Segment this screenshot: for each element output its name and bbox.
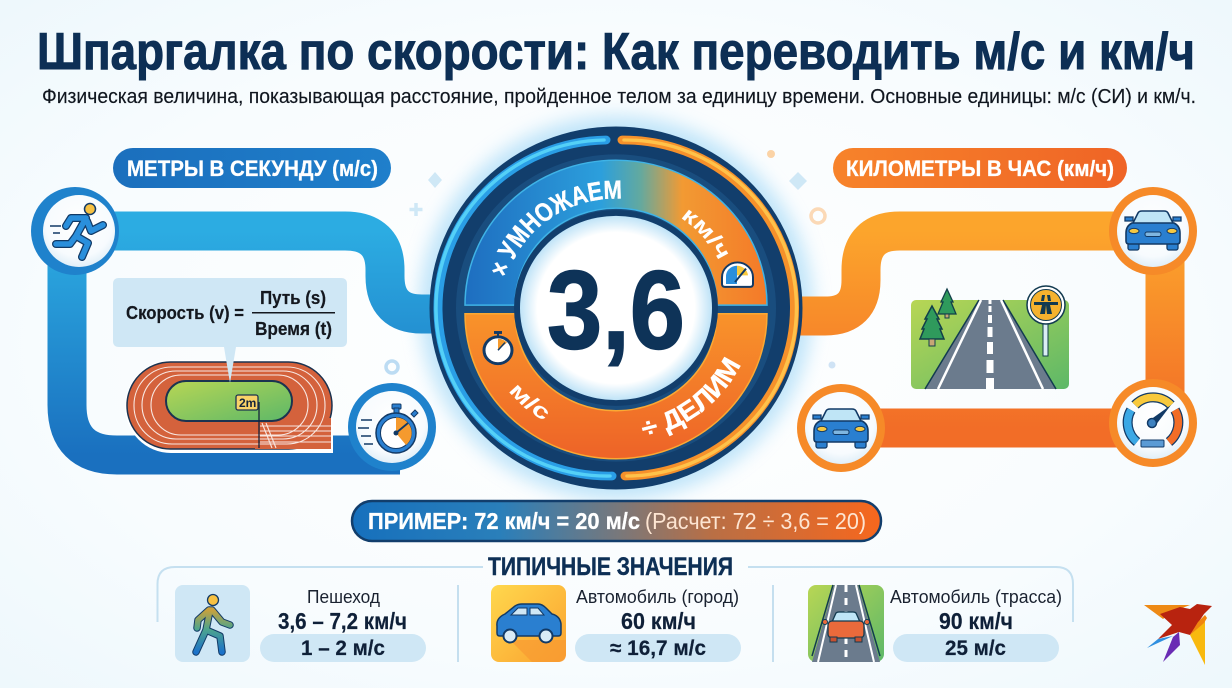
highway illustration (911, 286, 1069, 389)
panel: highway car (808, 585, 1062, 662)
icon: runner (31, 187, 119, 275)
formula callout (113, 278, 347, 383)
glow behind central ring (419, 116, 813, 500)
value pill: ≈ 16,7 м/с (610, 637, 706, 660)
icon: small stopwatch (484, 331, 512, 364)
panel: pedestrian: Пешеход (307, 587, 380, 607)
formula callout: Время (t) (255, 319, 332, 339)
icon: stopwatch (348, 383, 436, 471)
value pill (260, 634, 426, 662)
central conversion ring (430, 126, 802, 490)
badge: километры в час: КИЛОМЕТРЫ В ЧАС (км/ч) (846, 156, 1114, 181)
example pill (352, 501, 881, 541)
label: м/с: м/с (509, 384, 548, 419)
badge: метры в секунду: МЕТРЫ В СЕКУНДУ (м/с) (127, 156, 378, 181)
panel: pedestrian: 3,6 – 7,2 км/ч (278, 608, 407, 634)
badge: километры в час (833, 148, 1127, 188)
label: км/ч: км/ч (682, 210, 728, 259)
icon: speedometer (1109, 379, 1197, 467)
panel: city car (491, 585, 741, 662)
panel: metres per second track (31, 148, 445, 471)
orange path (790, 231, 1165, 428)
running track illustration: 2m (239, 396, 256, 410)
value pill (893, 634, 1059, 662)
panel: kilometres per hour track (790, 148, 1197, 472)
icon: car left (797, 384, 885, 472)
example pill: (Расчет: 72 ÷ 3,6 = 20) (645, 508, 866, 534)
panel: city car: 60 км/ч (621, 608, 696, 634)
formula callout: Путь (s) (260, 288, 326, 308)
decorative sparkles (386, 150, 836, 373)
panel: highway car: Автомобиль (трасса) (890, 587, 1062, 607)
logo: bird (1144, 604, 1212, 665)
subtitle: Физическая величина, показывающая расстояние, пройденное телом за единицу времени. Основные единицы: м/с (СИ) и км/ч. (42, 86, 1196, 108)
value pill (575, 634, 741, 662)
badge: метры в секунду (113, 148, 391, 188)
value pill: 1 – 2 м/с (301, 637, 385, 660)
icon: car top (1109, 187, 1197, 275)
icon: highway car (808, 585, 884, 662)
icon: small gauge (722, 262, 753, 287)
number 3,6: 3,6 (547, 248, 685, 373)
panel: city car: Автомобиль (город) (576, 587, 739, 607)
formula callout: Скорость (v) = (126, 303, 244, 323)
panel: pedestrian (175, 585, 426, 662)
panel: highway car: 90 км/ч (939, 608, 1013, 634)
heading: типичные значения: ТИПИЧНЫЕ ЗНАЧЕНИЯ (488, 553, 733, 581)
running track illustration (125, 360, 334, 453)
value pill: 25 м/с (945, 637, 1006, 660)
blue path (67, 231, 445, 455)
label: делим: ÷ ДЕЛИМ (642, 356, 741, 436)
icon: city car (491, 585, 566, 662)
label: умножаем: × УМНОЖАЕМ (492, 180, 621, 276)
icon: pedestrian (175, 585, 250, 662)
example pill: ПРИМЕР: 72 км/ч = 20 м/с (368, 508, 640, 534)
